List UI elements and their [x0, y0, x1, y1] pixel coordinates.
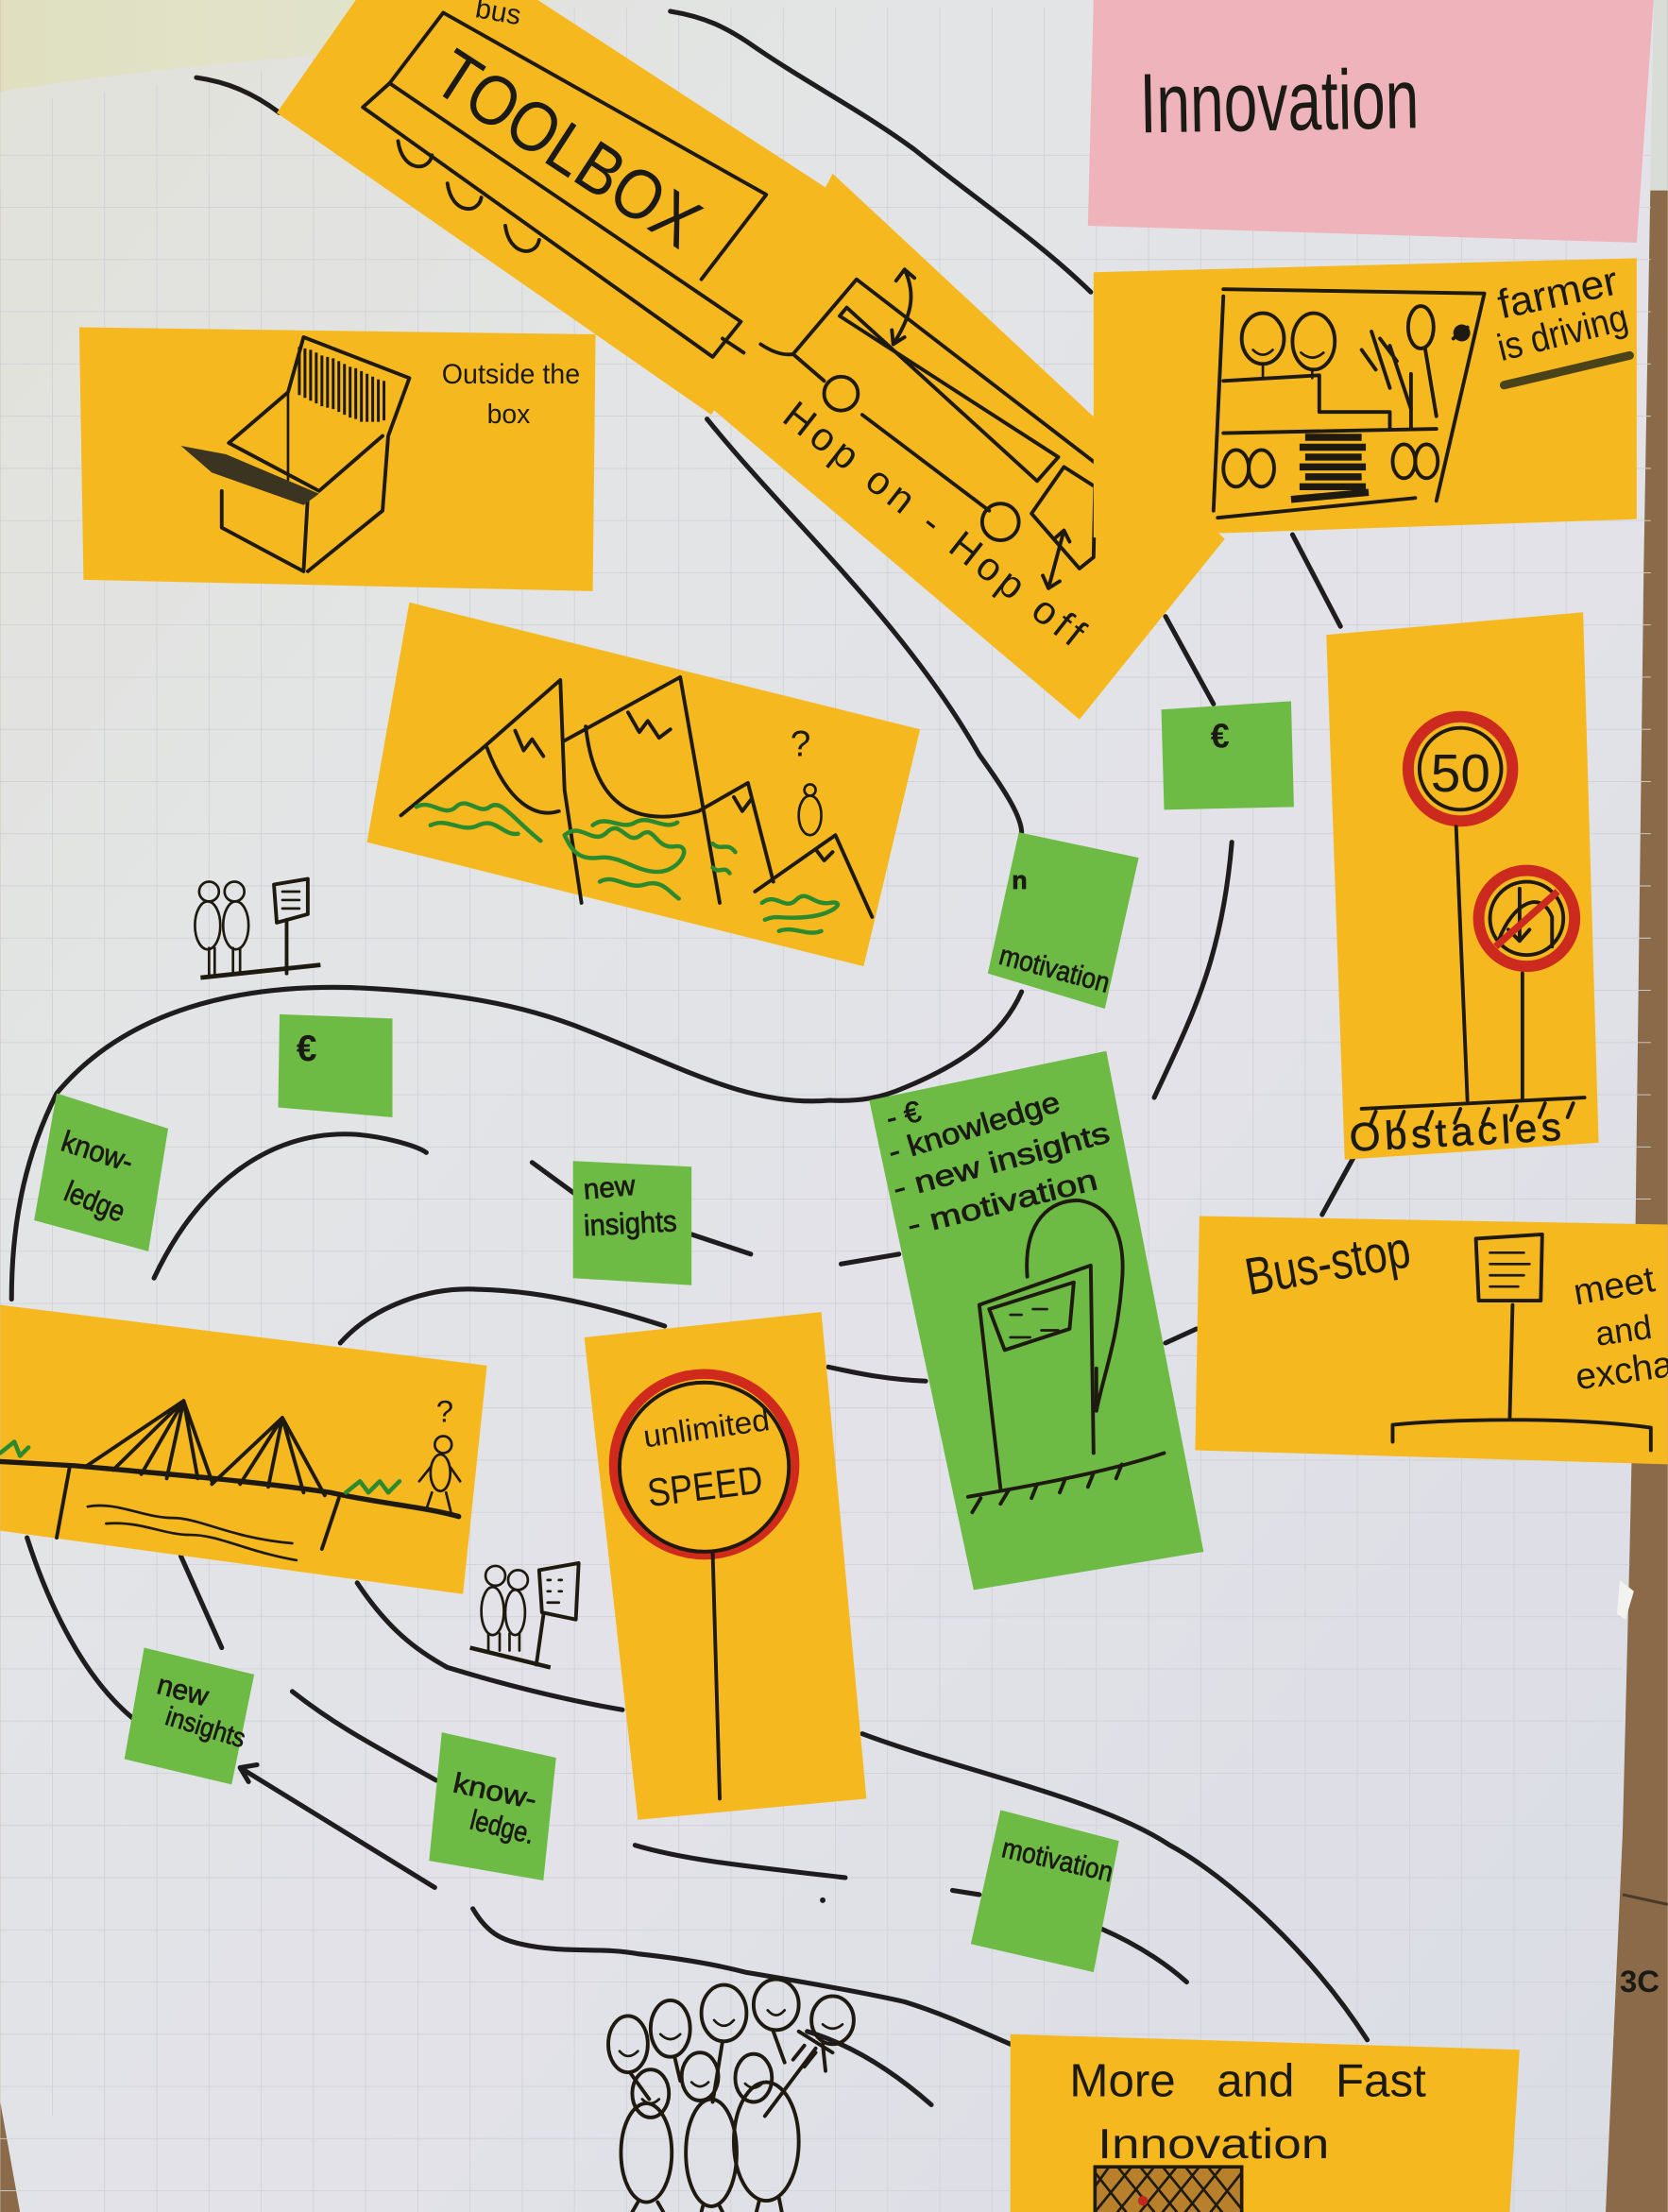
icon: information pillar [968, 1200, 1165, 1512]
icon: goal net [1095, 2167, 1242, 2212]
label: more and fast: More and Fast [1069, 2055, 1426, 2107]
label: and: and [1593, 1308, 1654, 1353]
label: outside the box: Outside the [442, 359, 580, 390]
icon: two people at bus stop lower [470, 1563, 579, 1667]
list: resources [882, 1085, 1113, 1242]
label: question mark: ? [791, 724, 810, 765]
icon: crowd of farmers [608, 1980, 854, 2212]
label: unlimited: unlimited [641, 1402, 772, 1454]
note: toolbox [277, 0, 845, 415]
note: hop on hop off [713, 174, 1225, 720]
note: outside the box [79, 328, 596, 591]
note: new insights lower [125, 1648, 254, 1784]
note: unlimited speed [585, 1312, 866, 1820]
label: insights: insights [162, 1701, 249, 1754]
note: bus stop [1195, 1217, 1668, 1464]
label: motivation: motivation [996, 940, 1113, 999]
label: box: box [487, 400, 530, 430]
icon: mountain range [400, 677, 872, 933]
icon: tractor cab with people [1214, 289, 1485, 518]
label: euro: € [1211, 718, 1230, 756]
note: large green information totem [869, 1051, 1203, 1590]
label: is driving second line: is driving [1493, 296, 1632, 369]
label: TOOLBOX: TOOLBOX [421, 34, 715, 263]
label: farmer is driving: farmer [1494, 259, 1622, 328]
icon: speed sign 50 [1408, 717, 1512, 1100]
note: mountains [367, 603, 920, 966]
list: resources: - € [882, 1095, 924, 1135]
underline [1504, 355, 1629, 385]
label: question mark: ? [436, 1394, 453, 1429]
icon: open box [180, 337, 409, 571]
label: euro: € [297, 1029, 317, 1069]
note: new insights [573, 1161, 691, 1285]
note: euro left [279, 1014, 392, 1117]
icon: speed sign [614, 1374, 794, 1798]
label: hop on hop off: Hop on - Hop off [775, 392, 1094, 655]
hand drawn roads [11, 11, 1368, 2104]
label: innovation: Innovation [1098, 2120, 1329, 2168]
list: resources: - knowledge [884, 1085, 1064, 1168]
label: new: new [154, 1669, 213, 1712]
label: insights: insights [583, 1204, 677, 1242]
icon: bus [760, 269, 1095, 588]
note: knowledge lower [429, 1732, 556, 1880]
label: know-: know- [58, 1125, 138, 1179]
note: farmer is driving [1094, 258, 1637, 537]
label: new: new [582, 1170, 637, 1206]
title: Innovation: Innovation [1139, 51, 1420, 150]
marker on background edge: 3C [1620, 1964, 1659, 1999]
label: fragment n: n [1012, 866, 1028, 894]
icon: ground [1362, 1097, 1585, 1126]
label: bus-stop: Bus-stop [1240, 1219, 1415, 1306]
note: motivation lower [971, 1810, 1119, 1972]
note: euro top [1162, 701, 1294, 809]
note: pink Innovation title [1088, 0, 1654, 243]
icon: toolbox cart [363, 12, 766, 357]
note: obstacles [1326, 612, 1599, 1160]
label: 50: 50 [1431, 744, 1490, 804]
label: ledge: ledge. [467, 1805, 537, 1850]
label: motivation: motivation [999, 1832, 1116, 1888]
note: more and fast innovation [1011, 2034, 1520, 2212]
label: meet: meet [1571, 1259, 1658, 1313]
icon: two people at bus stop top [195, 879, 320, 978]
label: speed: SPEED [645, 1457, 765, 1515]
icon: cable stayed bridge [0, 1401, 460, 1560]
list: resources: - motivation [904, 1163, 1100, 1242]
note: bridge [0, 1305, 487, 1594]
note: motivation [988, 832, 1139, 1009]
icon: bus stop sign [1392, 1234, 1651, 1450]
list: resources: - new insights [889, 1115, 1113, 1205]
label: obstacles: Obstacles [1349, 1104, 1562, 1160]
icon: no overtaking sign [1479, 871, 1574, 1100]
label: know-: know- [451, 1767, 539, 1815]
label: ledge: ledge [60, 1175, 129, 1229]
note: knowledge [34, 1094, 168, 1251]
